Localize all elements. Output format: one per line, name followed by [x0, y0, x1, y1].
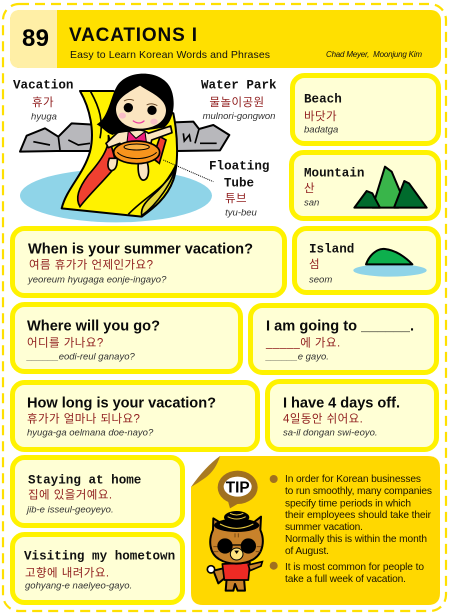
tip text 1: specify time periods in which — [285, 498, 411, 510]
hair — [97, 74, 174, 135]
panel: Where will you go — [12, 304, 240, 372]
panel: I have 4 days off: sa-il dongan swi-eoyo. — [283, 428, 378, 438]
icon: island — [353, 249, 427, 277]
label: Water Park — [201, 78, 277, 122]
tip text 1: their employees should take their — [285, 510, 432, 521]
tube — [114, 141, 160, 164]
panel: Beach — [292, 76, 438, 144]
panel: How long is your vacation: How long is your vacation? — [27, 396, 216, 412]
panel: I am going to: ______e gayo. — [265, 352, 329, 362]
panel: tip — [191, 456, 440, 605]
authors: Chad Meyer, Moonjung Kim — [326, 50, 422, 59]
panel: Where will you go: 어디를 가나요? — [27, 336, 104, 350]
panel: Mountain: 산 — [304, 182, 315, 195]
panel: Beach: badatga — [304, 124, 338, 136]
panel: Island: 섬 — [309, 258, 320, 271]
panel: Staying at home — [12, 458, 182, 526]
label: Water Park: Water Park — [201, 78, 277, 92]
panel: Beach: Beach — [304, 92, 342, 106]
panel: How long is your vacation: hyuga-ga oelmana doe-nayo? — [27, 428, 154, 438]
panel: Where will you go: Where will you go? — [27, 318, 160, 334]
tip text 2 — [285, 562, 424, 585]
panel: How long is your vacation — [12, 382, 258, 450]
panel: I have 4 days off — [268, 382, 436, 450]
label: Vacation: hyuga — [31, 112, 57, 122]
water pool — [20, 169, 212, 222]
tip text 1: summer vacation. — [285, 522, 363, 533]
eyes, cheeks, mouth — [124, 103, 133, 112]
icon: cat mascot — [207, 511, 263, 591]
panel: Mountain — [292, 152, 438, 218]
body and arm — [106, 126, 172, 148]
label: Floating Tube: 튜브 — [225, 192, 247, 205]
label: Floating Tube: Floating — [209, 160, 269, 174]
header banner — [10, 10, 441, 68]
rocks — [20, 122, 229, 152]
tip text 1: In order for Korean businesses — [285, 474, 421, 485]
panel: Where will you go: ______eodi-reul ganayo? — [26, 352, 135, 362]
label: Water Park: mulnori-gongwon — [203, 111, 275, 122]
pointer line — [163, 160, 213, 182]
label: Vacation: 휴가 — [32, 96, 54, 109]
label: Vacation: Vacation — [13, 78, 73, 92]
subtitle: Easy to Learn Korean Words and Phrases — [70, 49, 270, 61]
panel: When is your summer vacation: yeoreum hyugaga eonje-ingayo? — [27, 274, 167, 286]
panel: Beach: 바닷가 — [304, 110, 337, 123]
panel: Mountain: Mountain — [304, 166, 364, 180]
panel: Visiting my hometown: 고향에 내려가요. — [25, 566, 110, 580]
panel: Mountain: san — [304, 198, 319, 208]
lesson number: 89 — [22, 25, 49, 52]
panel: When is your summer vacation: 여름 휴가가 언제인가요? — [29, 258, 153, 272]
panel: Visiting my hometown: Visiting my hometown — [24, 550, 175, 564]
panel: Island: Island — [309, 242, 354, 256]
label: Water Park: 물놀이공원 — [209, 95, 265, 109]
panel: Staying at home: jib-e isseul-geoyeyo. — [25, 504, 114, 516]
icon: mountain — [354, 167, 427, 208]
panel: I am going to: _____에 가요. — [265, 336, 341, 350]
panel: Staying at home: Staying at home — [28, 474, 141, 488]
tip text 1: to run smoothly, many companies — [285, 486, 432, 497]
slide — [62, 91, 177, 217]
panel: Island — [294, 228, 438, 292]
girl — [97, 74, 174, 180]
legs — [108, 158, 148, 180]
bullet 2 — [270, 562, 278, 570]
panel: Visiting my hometown: gohyang-e naelyeo-gayo. — [25, 580, 132, 592]
panel: Visiting my hometown — [12, 534, 182, 602]
label: Floating Tube: tyu-beu — [225, 208, 258, 218]
illustration: girl on water slide — [20, 74, 229, 222]
panel: Island: seom — [309, 274, 332, 286]
tip text 1: Normally this is within the month — [285, 534, 427, 545]
label: Vacation — [13, 78, 73, 122]
page fold — [191, 456, 220, 487]
tip speech bubble — [218, 471, 258, 508]
panel: I am going to: I am going to ______. — [266, 318, 414, 334]
bullet 1 — [270, 475, 278, 483]
label: Floating Tube — [209, 160, 269, 218]
panel: I have 4 days off: I have 4 days off. — [283, 396, 400, 412]
title: VACATIONS I — [69, 25, 197, 46]
tip speech bubble: TIP — [226, 479, 250, 496]
tip text 1: of August. — [285, 546, 329, 557]
panel: I am going to — [250, 306, 436, 372]
panel: Staying at home: 집에 있을거예요. — [28, 488, 112, 502]
panel: When is your summer vacation: When is your summer vacation? — [28, 242, 253, 258]
tip text 1 — [285, 474, 432, 557]
tip text 2: It is most common for people to — [285, 562, 424, 573]
tip text 2: take a full week of vacation. — [285, 574, 406, 585]
face — [116, 86, 166, 129]
panel: How long is your vacation: 휴가가 얼마나 되나요? — [27, 412, 140, 426]
bikini — [127, 131, 147, 145]
panel: I have 4 days off: 4일동안 쉬어요. — [283, 412, 363, 426]
label: Floating Tube: Tube — [224, 176, 254, 190]
panel: When is your summer vacation — [12, 228, 284, 296]
